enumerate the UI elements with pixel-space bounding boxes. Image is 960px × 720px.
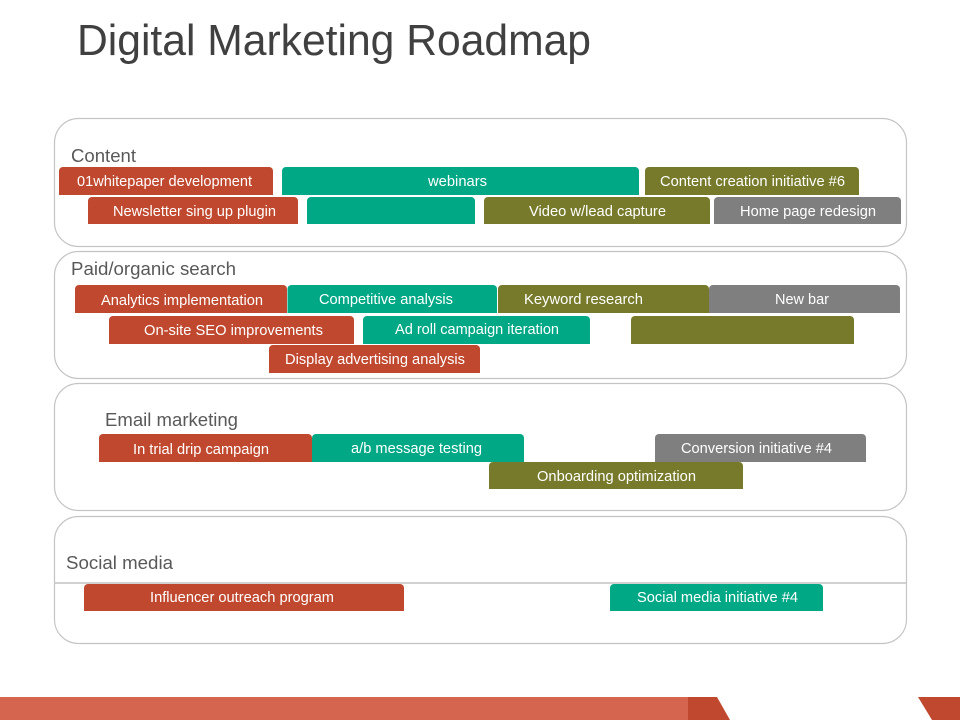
- bar: a/b message testing: a/b message testing: [351, 441, 482, 457]
- bar: webinars: webinars: [427, 174, 487, 190]
- bar: on-site seo improvements: On-site SEO improvements: [144, 323, 323, 339]
- bar: social media initiative: Social media initiative #4: [637, 590, 798, 606]
- bar: 01whitepaper development: [59, 167, 273, 195]
- bar: ad roll campaign iteration: Ad roll campaign iteration: [395, 322, 559, 338]
- bar: display advertising analysis: Display advertising analysis: [285, 352, 465, 368]
- heading: email marketing: Email marketing: [105, 410, 238, 430]
- bar: keyword research: [498, 285, 709, 313]
- heading: paid/organic search: Paid/organic search: [71, 259, 236, 279]
- bar: competitive analysis: [288, 285, 497, 313]
- heading: social media: Social media: [66, 553, 174, 573]
- bar: empty teal: [307, 197, 475, 224]
- bar: new bar: [709, 285, 900, 313]
- bar: home page redesign: Home page redesign: [740, 204, 876, 220]
- bar: social media initiative: [610, 584, 823, 611]
- title: Digital Marketing Roadmap: [77, 16, 591, 65]
- bar: on-site seo improvements: [109, 316, 354, 344]
- bar: analytics implementation: Analytics implementation: [101, 293, 263, 309]
- bar: video w/lead capture: Video w/lead capture: [529, 204, 666, 220]
- bar: video w/lead capture: [484, 197, 710, 224]
- bar: new bar: New bar: [775, 292, 829, 308]
- bar: content creation initiative: Content creation initiative #6: [660, 174, 845, 190]
- bar: competitive analysis: Competitive analysis: [319, 292, 453, 308]
- bar: newsletter sign up plugin: Newsletter sing up plugin: [113, 204, 276, 220]
- bar: empty olive: [631, 316, 854, 344]
- bar: conversion initiative: [655, 434, 866, 462]
- panel: social media: [54, 516, 906, 644]
- panel: paid/organic search: [54, 252, 906, 378]
- bar: a/b message testing: [312, 434, 524, 462]
- bar: 01whitepaper development: 01whitepaper development: [77, 174, 252, 190]
- bar: analytics implementation: [75, 285, 287, 313]
- bar: content creation initiative: [645, 167, 859, 195]
- bar: ad roll campaign iteration: [363, 316, 590, 344]
- bar: webinars: [282, 167, 639, 195]
- bar: onboarding optimization: Onboarding optimization: [537, 469, 696, 485]
- bar: display advertising analysis: [269, 345, 480, 373]
- bar: home page redesign: [714, 197, 901, 224]
- bar: in trial drip campaign: In trial drip campaign: [133, 442, 269, 458]
- bar: influencer outreach program: [84, 584, 404, 611]
- bar: conversion initiative: Conversion initiative #4: [681, 441, 832, 457]
- bar: onboarding optimization: [489, 462, 743, 489]
- bar: keyword research: Keyword research: [524, 292, 643, 308]
- panel: email marketing: [54, 384, 906, 510]
- bar: influencer outreach program: Influencer outreach program: [150, 590, 334, 606]
- footer band: [0, 697, 960, 720]
- bar: newsletter sign up plugin: [88, 197, 298, 224]
- panel: content: [54, 118, 906, 246]
- heading: content: Content: [71, 146, 136, 166]
- bar: in trial drip campaign: [99, 434, 312, 462]
